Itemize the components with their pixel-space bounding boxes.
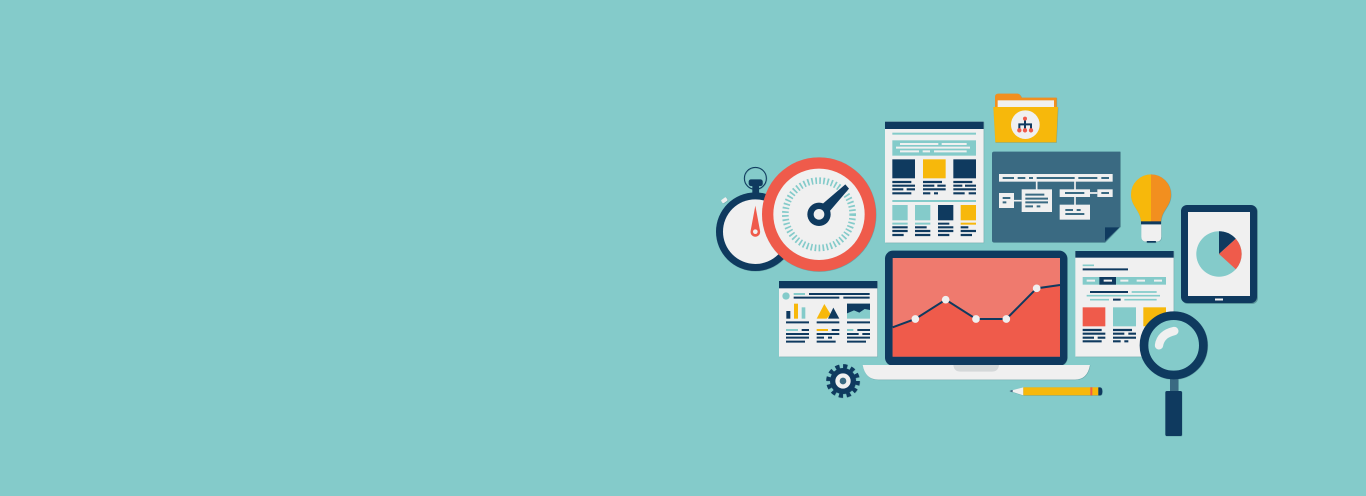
icon: light bulb [1131,174,1171,243]
panel: small dashboard document [779,281,877,357]
panel: flow chart note [992,152,1120,242]
icon: gear [829,367,857,395]
icon: folder [993,94,1058,142]
icon: tablet with pie chart [1181,205,1257,303]
panel: report document [885,122,984,243]
icon: pencil [1009,387,1102,395]
icon: stopwatch [716,167,795,271]
icon: speed gauge [762,157,876,271]
panel: web page document [1075,251,1174,357]
panel: laptop line chart [863,251,1090,380]
icon: magnifying glass [1144,316,1203,436]
